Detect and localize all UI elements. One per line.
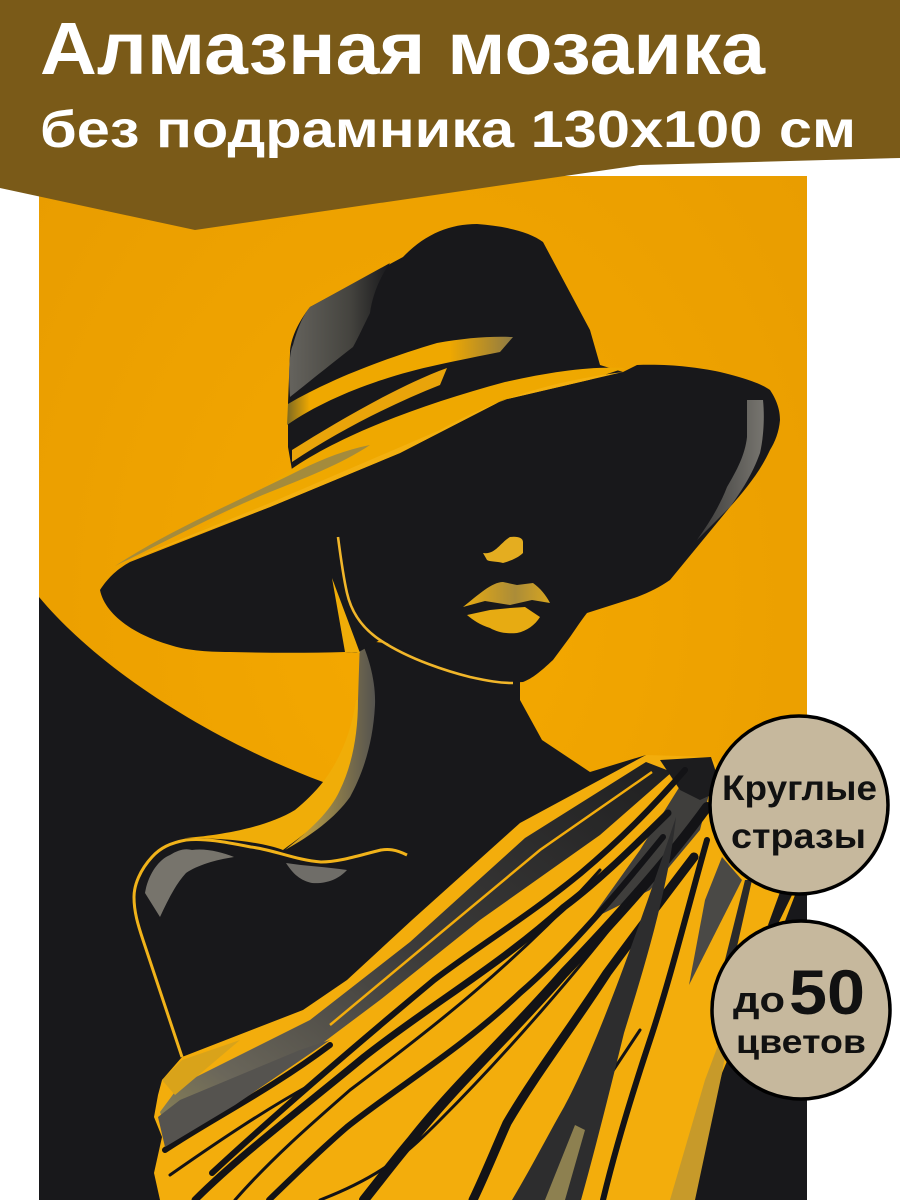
left gold fold tip [162, 1040, 240, 1095]
band: second gold stripe [292, 368, 447, 462]
artwork: woman in hat [39, 176, 807, 1200]
neck ribbon: grey hatching [285, 638, 375, 850]
fabric outer stripes between badges [715, 880, 752, 1000]
upper grey fold highlight line [330, 772, 652, 1025]
badge: round rhinestones: стразы [731, 817, 866, 856]
brim shading [697, 400, 764, 540]
gold area beneath band [200, 368, 625, 530]
fabric base [154, 755, 795, 1200]
badge: up to 50 colours: 50 [789, 958, 865, 1028]
shoulder line [134, 839, 407, 1057]
banner shape [0, 0, 900, 230]
right edge hatch [670, 1000, 735, 1200]
band: upper gold stripe [287, 337, 513, 425]
badge: round rhinestones: Круглые [722, 769, 877, 808]
lower lip [467, 607, 540, 633]
top fold dark [660, 757, 722, 800]
upper grey fold [160, 762, 672, 1140]
top fold grey [590, 770, 715, 920]
hat brim [100, 365, 780, 683]
badge: up to 50 colours: до [733, 979, 785, 1020]
right grey fold [689, 857, 742, 985]
brim grey highlight [115, 445, 370, 566]
wedge gold tail [545, 1125, 585, 1200]
figure: neck and shoulders [300, 640, 700, 1050]
hat band [287, 337, 513, 462]
subtitle: без подрамника 130х100 см [40, 101, 856, 159]
dark grey wedge fold [512, 817, 676, 1200]
badge: round rhinestones [710, 716, 888, 894]
jaw line [338, 537, 513, 683]
badge: up to 50 colours [712, 921, 890, 1099]
dark background curve [39, 597, 807, 1200]
title: Алмазная мозаика [40, 7, 766, 90]
nose [483, 537, 523, 563]
artwork background [39, 176, 807, 1200]
collarbone grey hatching [286, 863, 347, 883]
shoulder grey hatching [145, 849, 234, 917]
lower-left grey fold [158, 1040, 330, 1147]
lips [463, 582, 550, 633]
upper lip [463, 582, 550, 607]
hat crown shading [289, 263, 390, 397]
top banner [0, 0, 900, 230]
hat crown [288, 224, 623, 470]
neck gold sliver [332, 578, 360, 653]
brim gold edge [115, 372, 623, 566]
black fold lines [165, 770, 707, 1200]
neck ribbon: gold [186, 700, 366, 850]
badge: up to 50 colours: цветов [736, 1023, 866, 1060]
draped fabric [154, 755, 795, 1200]
